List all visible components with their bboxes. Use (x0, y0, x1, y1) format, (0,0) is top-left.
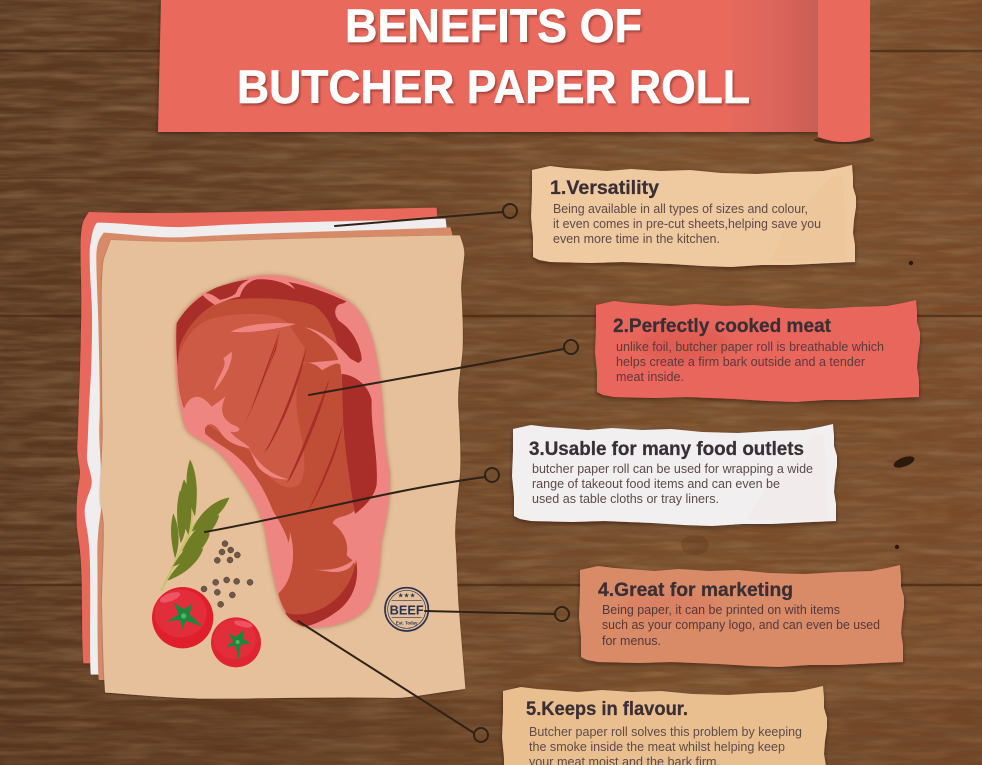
body text: such as your company logo, and can even be used (602, 618, 880, 632)
illustration: paper stack with steak (77, 208, 465, 698)
body text (602, 603, 880, 648)
body text: helps create a firm bark outside and a tender (616, 355, 865, 369)
leader line 1 (335, 204, 517, 226)
heading: 4.Great for marketing (598, 580, 793, 601)
body text: the smoke inside the meat whilst helping keep (529, 740, 785, 754)
body text: even more time in the kitchen. (553, 232, 720, 246)
beef stamp logo: BEEF (390, 602, 424, 617)
body text: Being available in all types of sizes and colour, (553, 202, 808, 216)
title banner: paper roll (158, 0, 874, 144)
body text (532, 462, 813, 506)
card 3: usable for many food outlets (512, 424, 837, 526)
heading: 2.Perfectly cooked meat (613, 316, 832, 337)
steak fat outline (175, 275, 390, 627)
grill marks (244, 330, 343, 510)
tomato small (211, 617, 261, 667)
main meat (178, 298, 356, 621)
body text (616, 340, 884, 384)
leader line 2 (309, 340, 578, 395)
leader line 5 (298, 621, 488, 742)
body text: Butcher paper roll solves this problem by keeping (529, 725, 802, 739)
steak (175, 275, 390, 627)
body text: butcher paper roll can be used for wrapping a wide (532, 462, 813, 476)
card 5: keeps in flavour (502, 686, 827, 765)
body text: meat inside. (616, 370, 684, 384)
body text: Being paper, it can be printed on with items (602, 603, 840, 617)
right dark sinew (342, 374, 377, 514)
card 2: perfectly cooked meat (595, 300, 920, 402)
tomato large (152, 587, 213, 648)
heading: 3.Usable for many food outlets (529, 439, 804, 460)
body text (529, 725, 802, 765)
card 4: great for marketing (579, 565, 904, 667)
fat streaks (184, 276, 363, 593)
heading: 1.Versatility (550, 178, 659, 199)
title heading (237, 0, 750, 113)
body text: for menus. (602, 634, 661, 648)
paper sheets stack (77, 208, 465, 698)
rosemary sprig (162, 459, 229, 590)
bottom dark rim (285, 560, 357, 627)
beef stamp logo: Est. Today (396, 621, 418, 626)
card 1: versatility (531, 165, 856, 267)
title heading: BUTCHER PAPER ROLL (237, 60, 750, 113)
heading: 5.Keeps in flavour. (526, 699, 688, 720)
body text: unlike foil, butcher paper roll is breathable which (616, 340, 884, 354)
body text: used as table cloths or tray liners. (532, 492, 719, 506)
title heading: BENEFITS OF (345, 0, 642, 52)
beef stamp logo: ★★★ (398, 592, 416, 600)
body text: range of takeout food items and can even be (532, 477, 780, 491)
leader line 3 (205, 468, 499, 532)
beef stamp logo (385, 588, 428, 631)
lighter meat centre (178, 314, 305, 487)
body text (553, 202, 821, 246)
leader line 4 (425, 607, 569, 621)
body text: it even comes in pre-cut sheets,helping save you (553, 217, 821, 231)
dark edge of meat (176, 279, 362, 407)
peppercorns (201, 541, 253, 607)
